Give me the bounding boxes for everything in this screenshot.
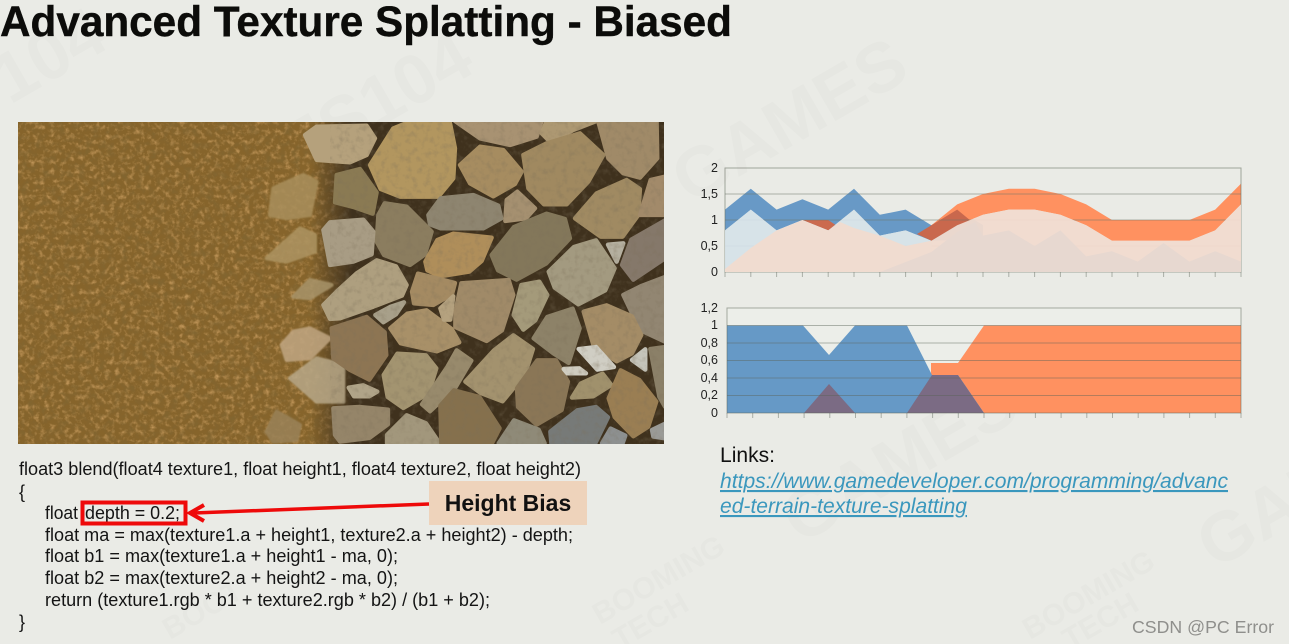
links — [720, 444, 1228, 518]
highlight box around depth — [82, 502, 186, 524]
overlap of lower heights — [880, 222, 1241, 272]
y axis labels — [701, 161, 718, 279]
links: ed-terrain-texture-splatting — [720, 495, 967, 518]
title: Advanced Texture Splatting - Biased — [0, 0, 732, 46]
arrow to depth — [190, 504, 429, 521]
blue area — [727, 326, 984, 413]
purple overlap areas — [804, 375, 984, 413]
y axis labels: 1,5 — [701, 187, 718, 201]
code block: float ma = max(texture1.a + height1, texture2.a + height2) - depth; — [45, 525, 573, 545]
callout: height bias — [429, 481, 587, 525]
y axis labels: 1,2 — [701, 301, 718, 315]
y axis labels: 0,8 — [701, 336, 718, 350]
code block: return (texture1.rgb * b1 + texture2.rgb * b2) / (b1 + b2); — [45, 590, 490, 610]
code block: float b1 = max(texture1.a + height1 - ma, 0); — [45, 546, 398, 566]
y axis labels: 0 — [711, 265, 718, 279]
code block: float b2 = max(texture2.a + height2 - ma, 0); — [45, 568, 398, 588]
code block: { — [19, 482, 25, 502]
y axis labels: 1 — [711, 213, 718, 227]
y axis labels: 0,6 — [701, 353, 718, 367]
line chart: heights with bias band — [701, 161, 1241, 279]
orange band — [931, 184, 1241, 241]
y axis labels — [701, 301, 718, 420]
y axis labels: 0,5 — [701, 239, 718, 253]
blue band — [725, 189, 983, 241]
orange area — [931, 326, 1241, 413]
y axis labels: 0,2 — [701, 388, 718, 402]
links: https://www.gamedeveloper.com/programming/advanc — [720, 470, 1228, 493]
sand-covered rocks at the transition — [267, 175, 343, 442]
rocks — [305, 121, 665, 443]
code block: float — [45, 503, 78, 523]
area chart: blend weights — [701, 301, 1241, 420]
y axis labels: 1 — [711, 318, 718, 332]
code block — [19, 459, 581, 632]
y axis labels: 0,4 — [701, 371, 718, 385]
callout: height bias: Height Bias — [445, 490, 571, 516]
watermarks: GAMES — [768, 362, 1030, 558]
csdn watermark: CSDN @PC Error — [1132, 617, 1274, 637]
links: Links: — [720, 444, 775, 467]
red overlap regions — [802, 220, 840, 230]
watermarks: BOOMING — [1017, 544, 1161, 644]
gridlines and ticks — [725, 168, 1241, 277]
code block: } — [19, 612, 25, 632]
watermarks: BOOMING — [587, 529, 731, 631]
code block: float3 blend(float4 texture1, float height1, float4 texture2, float height2) — [19, 459, 581, 479]
peach area — [725, 204, 1241, 272]
pale area under blue band — [725, 210, 931, 272]
terrain texture image: sand blending into rocks — [18, 121, 665, 444]
y axis labels: 0 — [711, 406, 718, 420]
watermarks: GAMES — [658, 22, 920, 218]
white-ish plot background — [727, 308, 1241, 413]
watermarks: MES104 — [214, 16, 485, 218]
y axis labels: 2 — [711, 161, 718, 175]
gridlines and ticks — [727, 308, 1241, 418]
watermarks: BOOT — [157, 574, 249, 644]
code block: depth = 0.2; — [85, 503, 180, 523]
